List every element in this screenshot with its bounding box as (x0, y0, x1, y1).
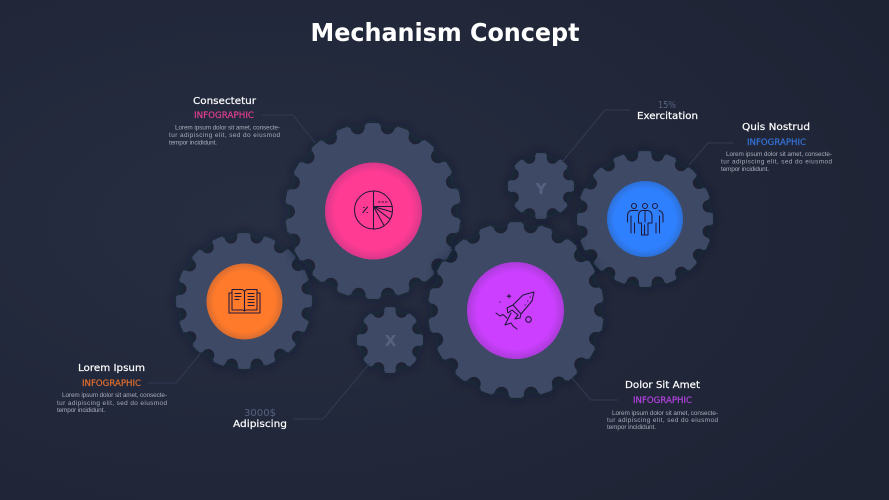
callout: Consectetur: tur adipiscing elit, sed do eiusmod (169, 132, 280, 139)
callout: Adipiscing 3000$: Adipiscing (233, 419, 287, 430)
callout: Exercitation 15%: Exercitation (637, 111, 698, 122)
callout: Quis Nostrud: Quis Nostrud (742, 122, 810, 133)
callout: Consectetur: tempor incididunt. (169, 140, 217, 146)
callout: Dolor Sit Amet: Lorem ipsum dolor sit amet, consecte- (612, 410, 718, 417)
callout: Consectetur: Consectetur (193, 96, 257, 107)
icon: pie chart (354, 191, 392, 229)
icon: rocket (496, 292, 534, 329)
icon: three people (628, 204, 663, 235)
callout: Dolor Sit Amet (572, 378, 718, 431)
callout: Lorem Ipsum: Lorem Ipsum (78, 363, 145, 374)
gear: pink (285, 123, 461, 299)
hub: purple (467, 262, 564, 359)
callout: Consectetur: Lorem ipsum dolor sit amet, consecte- (175, 124, 280, 132)
hub: blue (607, 181, 683, 257)
callout: Dolor Sit Amet: tur adipiscing elit, sed do eiusmod (607, 417, 718, 424)
callout: Dolor Sit Amet: tempor incididunt. (607, 424, 656, 431)
hub: orange (206, 264, 282, 340)
callout: Lorem Ipsum: Lorem ipsum dolor sit amet, consecte- (62, 392, 167, 399)
callout: Lorem Ipsum: tempor incididunt. (57, 407, 105, 414)
callout: Quis Nostrud: INFOGRAPHIC (747, 138, 806, 148)
hub: pink (325, 162, 422, 260)
gear: blue (577, 151, 713, 287)
gear: purple (428, 222, 604, 398)
gear: small Y (508, 153, 574, 219)
callout: Quis Nostrud: tempor incididunt. (721, 166, 769, 173)
callout: Dolor Sit Amet: Dolor Sit Amet (625, 380, 700, 391)
callout: Dolor Sit Amet: INFOGRAPHIC (633, 396, 692, 406)
callout: Quis Nostrud (689, 122, 832, 173)
callout: Lorem Ipsum: INFOGRAPHIC (82, 379, 141, 389)
small gear letter X: X (385, 332, 397, 350)
callout: Exercitation 15% (562, 100, 698, 162)
callout: Consectetur (169, 96, 315, 146)
callout: Quis Nostrud: tur adipiscing elit, sed do eiusmod (721, 159, 832, 166)
gear: orange (176, 233, 312, 369)
callout: Adipiscing 3000$: 3000$ (244, 408, 276, 419)
callout: Quis Nostrud: Lorem ipsum dolor sit amet, consecte- (726, 151, 832, 158)
gear: small X (357, 307, 423, 373)
callout: Lorem Ipsum: tur adipiscing elit, sed do eiusmod (57, 400, 167, 407)
callout: Consectetur: INFOGRAPHIC (194, 111, 254, 121)
title: Mechanism Concept (310, 18, 580, 47)
small gear letter Y: Y (535, 180, 548, 198)
callout: Adipiscing 3000$ (233, 363, 370, 430)
callout: Exercitation 15%: 15% (658, 100, 676, 111)
icon: open book (229, 290, 260, 313)
callout: Lorem Ipsum (57, 354, 200, 414)
